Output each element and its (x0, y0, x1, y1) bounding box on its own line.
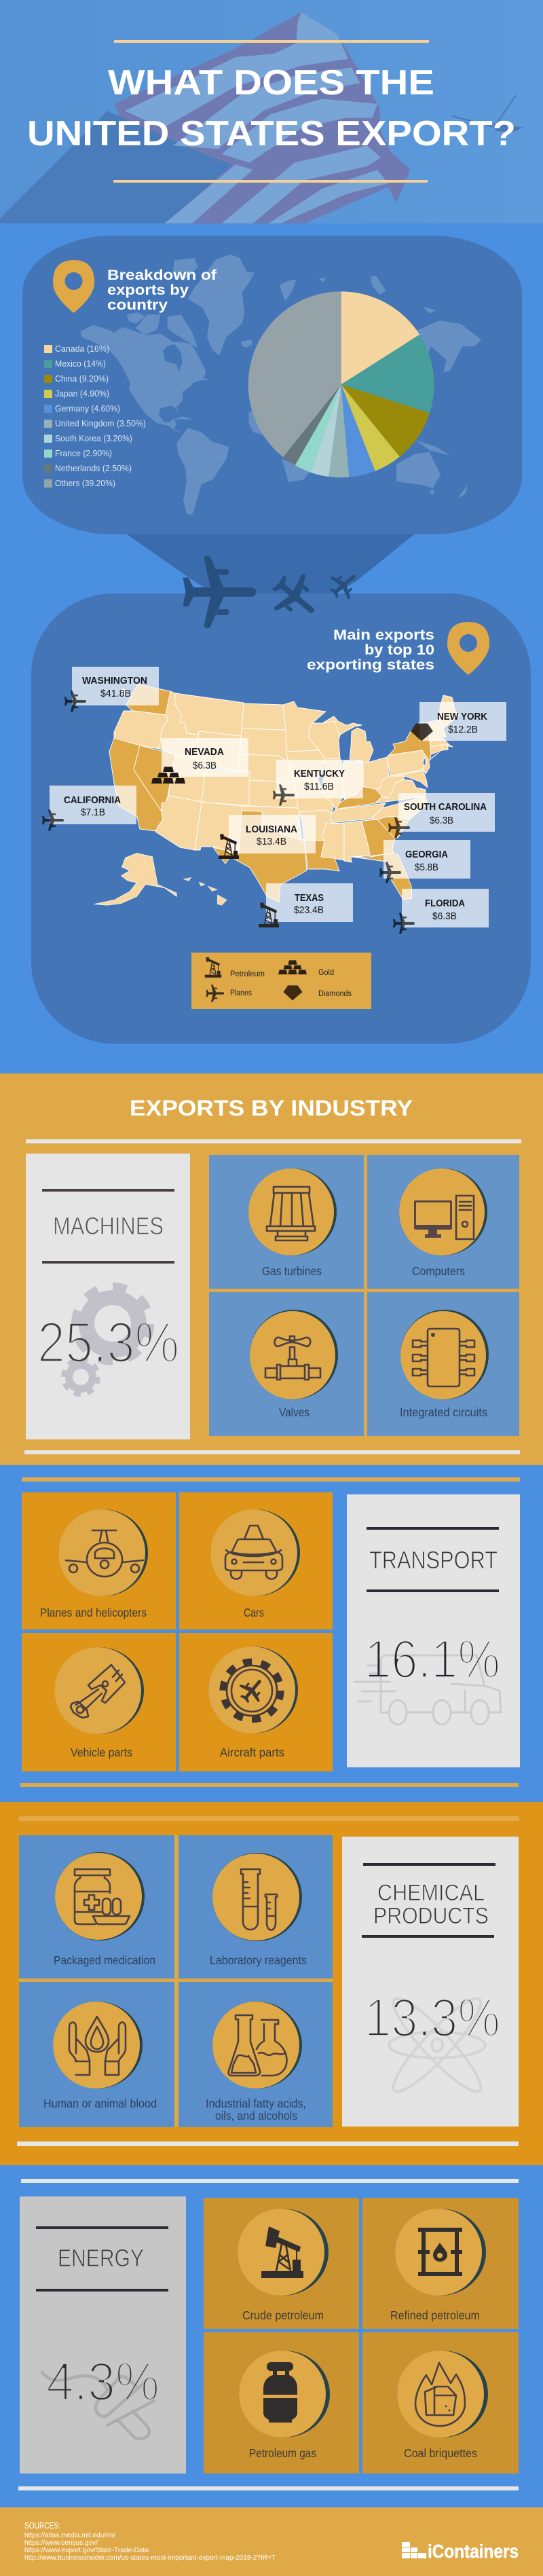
panel: machines stat: MACHINES (53, 1212, 164, 1240)
logo: iContainers (402, 2541, 519, 2562)
tile: aircraft parts (179, 1633, 333, 1771)
heading: main exports: exporting states (307, 657, 434, 673)
callout: Florida: FLORIDA (425, 898, 465, 909)
tile: petroleum gas (204, 2332, 359, 2473)
tile: planes and helicopters: Planes and helicopters (40, 1606, 147, 1619)
heading: main exports (307, 627, 434, 673)
section: transport (20, 1477, 520, 1787)
panel: transport stat: TRANSPORT (369, 1546, 498, 1574)
callout: Louisiana (229, 815, 316, 853)
panel: main exports by state (31, 593, 531, 1044)
legend: United Kingdom (3.50%) (55, 419, 146, 428)
icons: state export markers (42, 691, 433, 934)
callout: Texas: $23.4B (294, 905, 324, 916)
sources: http://www.businessinsider.com/us-states-most-important-export-map-2018-2?IR=T (24, 2554, 276, 2562)
pie chart (248, 291, 434, 477)
heading: breakdown of exports by country: Breakdown of (107, 267, 217, 283)
callout: Washington: WASHINGTON (82, 676, 147, 686)
tile: crude petroleum (204, 2198, 359, 2329)
legend: Germany (4.60%) (55, 404, 120, 413)
icons: decorative planes (183, 556, 364, 629)
tile: computers (367, 1155, 519, 1289)
icon: plug (42, 2372, 154, 2439)
tile: integrated circuits: Integrated circuits (400, 1405, 487, 1419)
tile: gas turbines: Gas turbines (262, 1264, 322, 1278)
callout: Kentucky: $11.6B (304, 781, 334, 792)
tile: valves (209, 1292, 364, 1436)
tile: cars: Cars (244, 1606, 264, 1619)
tile: packaged medication: Packaged medication (54, 1953, 155, 1967)
heading: breakdown of exports by country: country (107, 297, 168, 313)
callout: Texas (266, 883, 353, 922)
legend: export types: Gold (318, 969, 334, 977)
heading: main exports: Main exports (333, 627, 434, 643)
tile: valves: Valves (279, 1405, 310, 1419)
footer (0, 2507, 543, 2576)
heading: breakdown of exports by country: exports by (107, 282, 189, 298)
section: chemical products (0, 1802, 543, 2166)
flag illustration (0, 12, 523, 223)
legend: South Korea (3.20%) (55, 434, 132, 443)
tile: integrated circuits (367, 1292, 519, 1436)
panel: energy stat (20, 2196, 186, 2473)
section: energy (0, 2165, 543, 2507)
panel: energy stat: ENERGY (58, 2244, 144, 2272)
callout: Louisiana: LOUISIANA (246, 824, 298, 835)
tile: petroleum gas: Petroleum gas (249, 2446, 316, 2460)
callout: South Carolina (398, 793, 495, 832)
heading: exports by industry: EXPORTS BY INDUSTRY (130, 1096, 413, 1120)
title (27, 63, 516, 153)
callout: New York: $12.2B (448, 724, 478, 735)
callout: Georgia (383, 840, 470, 879)
tile: human or animal blood (19, 1982, 174, 2127)
legend: export types: Petroleum (230, 970, 265, 978)
title: WHAT DOES THE (108, 63, 434, 103)
callout: Louisiana: $13.4B (257, 836, 286, 847)
sources: https://atlas.media.mit.edu/en/ (24, 2531, 115, 2539)
callout: Nevada: NEVADA (185, 747, 225, 758)
legend: Others (39.20%) (55, 479, 115, 488)
tile: packaged medication (19, 1835, 174, 1979)
tile: refined petroleum: Refined petroleum (390, 2308, 480, 2322)
heading: breakdown of exports by country (107, 267, 217, 313)
title: UNITED STATES EXPORT? (27, 114, 516, 153)
world map backdrop (80, 255, 481, 515)
callout: California (50, 786, 136, 824)
tile: human or animal blood: Human or animal blood (43, 2097, 157, 2110)
callout: Kentucky: KENTUCKY (294, 769, 345, 779)
panel: breakdown by country (22, 236, 522, 534)
tile: coal briquettes (362, 2332, 519, 2473)
stat: transport share: 16.1% (364, 1629, 500, 1689)
tile: vehicle parts (22, 1633, 176, 1771)
icon: atom (385, 1990, 489, 2100)
map: US states (94, 684, 460, 905)
callout: California: CALIFORNIA (64, 795, 121, 806)
icon: gears (64, 1287, 149, 1394)
sources: SOURCES: (24, 2520, 60, 2531)
connector between panels (127, 534, 414, 593)
panel: machines stat (26, 1154, 190, 1439)
panel: chemical products stat: CHEMICAL (377, 1880, 485, 1906)
stat: chemical products share: 13.3% (364, 1987, 500, 2048)
callout: California: $7.1B (81, 807, 105, 818)
stat: energy share: 4.3% (46, 2351, 160, 2412)
header rule top (114, 40, 429, 43)
tile: cars (179, 1492, 333, 1630)
icon: map pin (53, 260, 94, 313)
callout: Florida (402, 889, 489, 927)
callout: Georgia: GEORGIA (405, 849, 448, 860)
tile: laboratory reagents: Laboratory reagents (210, 1953, 307, 1967)
legend: Japan (4.90%) (55, 389, 109, 399)
panel: transport stat (347, 1494, 520, 1767)
callout: New York (419, 702, 506, 741)
callout: South Carolina: SOUTH CAROLINA (404, 802, 487, 813)
sources (24, 2520, 276, 2562)
callout: Georgia: $5.8B (415, 862, 438, 873)
heading: main exports: by top 10 (364, 642, 434, 658)
header rule bottom (113, 180, 428, 183)
blue background section (0, 223, 543, 1073)
callout: Kentucky (276, 760, 363, 798)
tile: crude petroleum: Crude petroleum (242, 2308, 324, 2322)
tile: aircraft parts: Aircraft parts (220, 1746, 284, 1759)
tile: vehicle parts: Vehicle parts (71, 1746, 132, 1759)
callout: Washington: $41.8B (100, 688, 131, 699)
legend (44, 344, 146, 488)
header: flag photo banner (0, 0, 543, 223)
icon: truck (355, 1655, 501, 1725)
tile: gas turbines (209, 1155, 364, 1289)
panel: chemical products stat: PRODUCTS (373, 1903, 489, 1929)
sources: https://www.export.gov/State-Trade-Data (24, 2546, 149, 2554)
legend: China (9.20%) (55, 374, 109, 384)
legend: Netherlands (2.50%) (55, 464, 132, 473)
callout: New York: NEW YORK (437, 712, 487, 722)
callout: Nevada: $6.3B (193, 760, 217, 771)
tile: coal briquettes: Coal briquettes (404, 2446, 477, 2460)
sources: https://www.census.gov/ (24, 2539, 98, 2547)
panel: chemical products stat (342, 1837, 519, 2127)
callout: Texas: TEXAS (295, 893, 324, 904)
callout: South Carolina: $6.3B (430, 815, 453, 826)
tile: refined petroleum (362, 2198, 519, 2329)
callout: Nevada (162, 738, 248, 777)
legend: Mexico (14%) (55, 359, 106, 369)
tile: planes and helicopters (22, 1492, 176, 1630)
legend: export types (191, 953, 371, 1009)
section: machines (0, 1073, 543, 1465)
tile: computers: Computers (412, 1264, 465, 1278)
tile: industrial fatty acids, oils, and alcohols (179, 1982, 333, 2127)
callout: Washington (72, 667, 159, 705)
callout: Florida: $6.3B (432, 911, 457, 922)
legend: Canada (16%) (55, 344, 109, 354)
logo: iContainers: iContainers (428, 2541, 519, 2562)
icon: map pin (447, 622, 489, 675)
legend: export types: Planes (230, 989, 252, 997)
tile: laboratory reagents (179, 1835, 333, 1979)
tile: industrial fatty acids, oils, and alcohols: Industrial fatty acids, (206, 2097, 306, 2110)
legend: export types: Diamonds (318, 990, 352, 998)
stat: machines share: 25.3% (37, 1310, 179, 1374)
tile: industrial fatty acids, oils, and alcohols: oils, and alcohols (215, 2109, 297, 2122)
legend: France (2.90%) (55, 449, 112, 458)
